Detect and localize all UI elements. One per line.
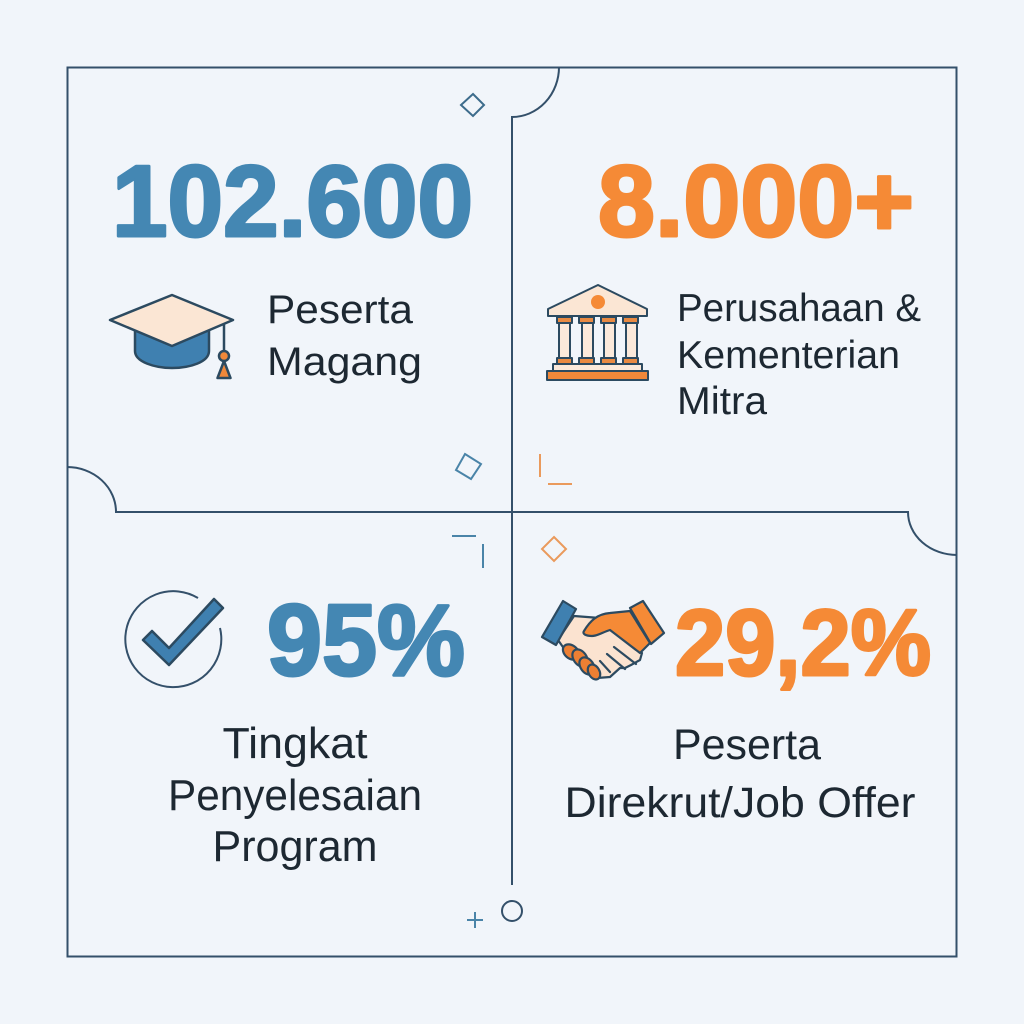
label: Perusahaan & Kementerian Mitra: Perusahaan & xyxy=(677,287,921,330)
icon: institution building xyxy=(547,285,648,380)
label: Tingkat Penyelesaian Program: Tingkat xyxy=(222,719,368,768)
label: Tingkat Penyelesaian Program: Program xyxy=(212,822,378,871)
decorative marks: orange xyxy=(540,454,572,561)
statistic: 29,2%: 29,2% xyxy=(675,590,931,695)
label: Perusahaan & Kementerian Mitra: Kementerian xyxy=(677,334,900,377)
icon: check circle xyxy=(125,591,223,687)
icon: handshake xyxy=(542,601,664,682)
label: Perusahaan & Kementerian Mitra: Mitra xyxy=(677,380,767,423)
label: Peserta Direkrut/Job Offer: Peserta xyxy=(673,721,821,769)
label: Perusahaan & Kementerian Mitra xyxy=(677,287,921,423)
label: Peserta Direkrut/Job Offer xyxy=(564,721,916,827)
icon: graduation cap xyxy=(110,295,233,378)
label: Peserta Direkrut/Job Offer: Direkrut/Job Offer xyxy=(564,779,916,827)
statistic: 95%: 95% xyxy=(267,585,465,697)
label: Peserta Magang: Magang xyxy=(267,340,422,384)
statistic: 8.000+: 8.000+ xyxy=(598,146,914,258)
statistic: 102.600: 102.600 xyxy=(112,146,473,258)
frame and dividers xyxy=(67,67,957,956)
label: Tingkat Penyelesaian Program: Penyelesaian xyxy=(168,771,422,820)
label: Peserta Magang xyxy=(267,288,422,384)
label: Peserta Magang: Peserta xyxy=(267,288,414,332)
label: Tingkat Penyelesaian Program xyxy=(168,719,422,871)
decorative marks: blue xyxy=(452,94,522,928)
